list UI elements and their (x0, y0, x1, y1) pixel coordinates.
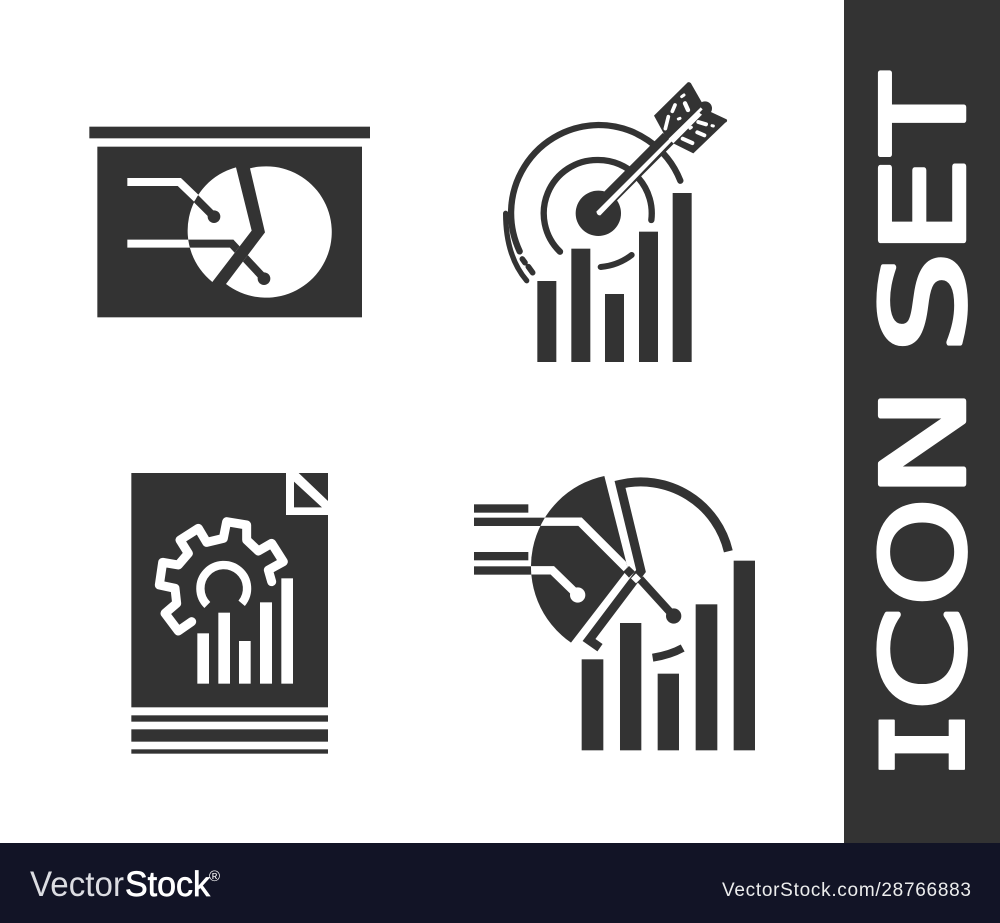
panel: icon set side banner (844, 0, 1000, 843)
heading: ICON SET: N (858, 387, 992, 498)
text lines (131, 715, 328, 754)
crossing diamonds (623, 566, 641, 583)
solid pie wedge (531, 476, 627, 643)
icon: document with gear and bars (131, 473, 328, 754)
heading: ICON SET (857, 72, 1000, 777)
heading: ICON SET: O (857, 498, 991, 606)
heading: ICON SET: E (858, 157, 992, 255)
small arc (653, 648, 683, 658)
heading: ICON SET: S (857, 251, 991, 354)
white circuit lines on wedge (528, 522, 628, 603)
pie outline slice (589, 482, 728, 648)
circuit lines outside pie (127, 182, 197, 244)
icon: target with arrow and bars (506, 82, 727, 362)
logo: VectorStock (30, 865, 220, 904)
logo: VectorStock: Stock (125, 865, 210, 904)
arrow (596, 82, 727, 215)
folded corner (286, 473, 328, 515)
circuit connector (640, 579, 673, 616)
board top rail (89, 127, 370, 138)
target rings (506, 125, 680, 281)
bar chart (537, 193, 692, 362)
bar chart (582, 561, 755, 750)
image id url: VectorStock.com/28766883 (722, 880, 971, 901)
panel: footer bar (0, 843, 1000, 923)
circuit lines inside pie (188, 195, 270, 285)
heading: ICON SET: T (858, 72, 992, 155)
logo: VectorStock: Vector (30, 865, 124, 904)
connector node (666, 608, 681, 624)
gear hub arc (200, 565, 247, 605)
data lines (474, 504, 545, 575)
heading: ICON SET: I (857, 712, 1000, 777)
bullseye (576, 191, 621, 236)
heading: ICON SET: C (858, 607, 992, 711)
gear outline (159, 522, 283, 631)
document page (131, 473, 328, 707)
icon: pie chart with circuit lines and bars (474, 476, 755, 750)
icon: presentation board with pie chart (89, 127, 370, 317)
logo: VectorStock: ® (209, 868, 220, 885)
pie chart slices (188, 166, 332, 298)
board panel (97, 147, 362, 317)
bar chart (197, 578, 293, 684)
